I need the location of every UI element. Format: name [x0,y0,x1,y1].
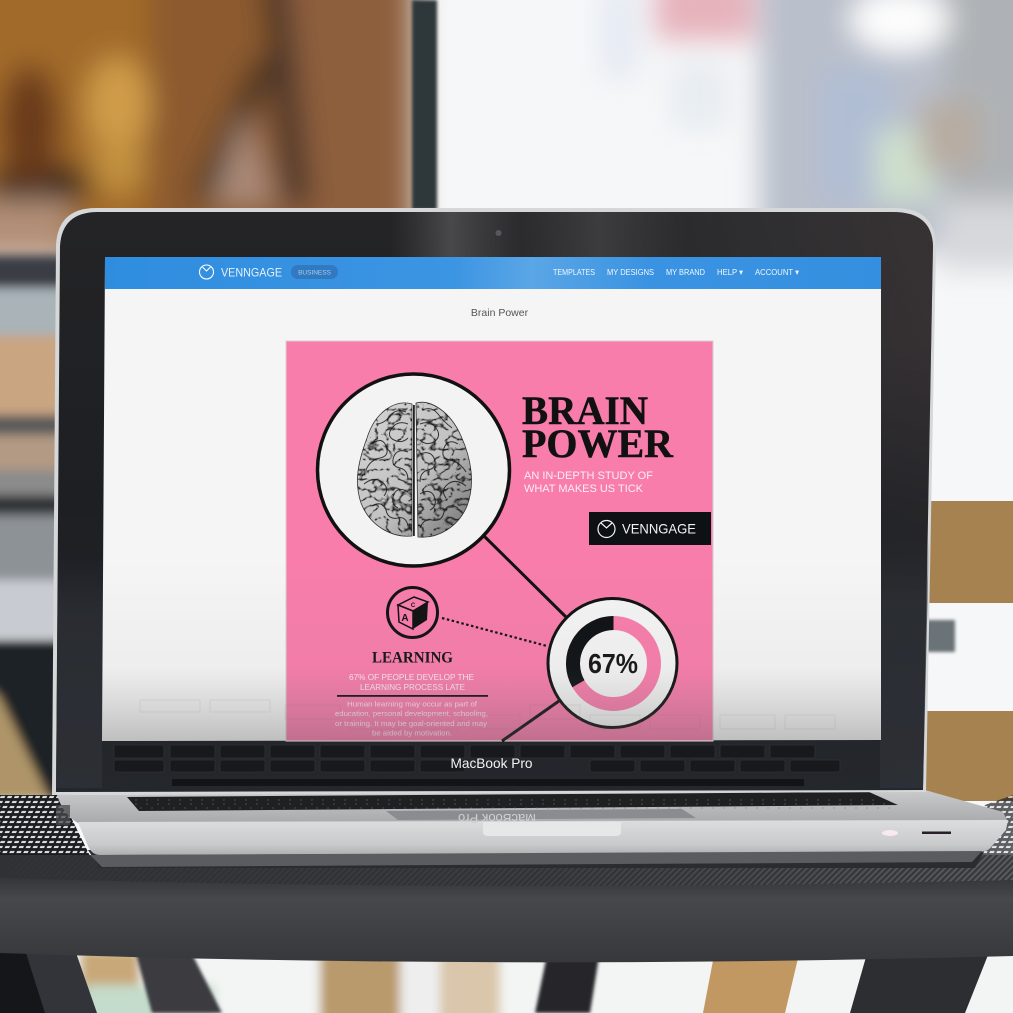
keyboard [127,792,898,811]
camera [496,230,502,236]
learning heading: LEARNING [372,650,454,666]
icon: alphabet block [388,588,438,638]
trackpad edge: MacBook Pro [458,811,536,826]
menu links: MY DESIGNS [607,267,654,277]
brain circle [318,374,510,566]
learning stat text [349,672,474,692]
Venngage logo block: VENNGAGE [622,520,696,536]
pink infographic page [286,341,713,741]
table with mesh surface [0,795,1013,962]
connector: brain to donut [483,535,567,618]
ports on base side [56,805,70,825]
learning stat text: 67% OF PEOPLE DEVELOP THE [349,672,474,682]
document title: Brain Power [471,307,529,319]
shadow under laptop [88,850,985,868]
menu links: HELP ▾ [717,267,744,277]
icon: alphabet block: A [401,613,409,624]
connector: donut downward [502,701,559,741]
icon: brain engraving [357,402,472,537]
learning body text: be aided by motivation. [372,728,452,738]
learning body text: education, personal development, schooling, [335,709,488,718]
logo mark [200,265,214,279]
icon: alphabet block: C [411,603,416,609]
Venngage logo block [589,512,711,545]
laptop base [56,790,1008,867]
learning body text [335,700,488,738]
donut chart: 67% [548,598,677,728]
status light [882,830,898,836]
title: Brain Power [522,388,674,466]
dotted connector [442,618,547,646]
title: Brain Power: POWER [522,421,674,466]
learning stat text: LEARNING PROCESS LATE [360,682,465,692]
business badge: BUSINESS [298,270,332,276]
menu links: TEMPLATES [553,267,595,277]
divider rule [337,695,488,697]
logo wordmark: VENNGAGE [221,266,282,280]
keyboard reflection on screen [102,560,881,741]
lower bezel reflection [880,540,929,788]
laptop [52,208,1008,868]
learning body text: or training. It may be goal-oriented and may [335,719,487,728]
screen [102,257,881,741]
title: Brain Power: BRAIN [522,388,648,433]
MacBook Pro label: MacBook Pro [450,755,533,771]
reflected keyboard [114,745,840,772]
subtitle: AN IN-DEPTH STUDY OF [524,470,653,482]
business badge [291,265,338,279]
infrared slot [922,832,951,834]
menu links [553,267,800,277]
subtitle: WHAT MAKES US TICK [524,483,644,495]
learning body text: Human learning may occur as part of [347,700,478,708]
latch [483,822,621,836]
space below the table [0,950,1013,1013]
trackpad edge [386,809,696,826]
menu links: ACCOUNT ▾ [755,267,800,277]
lid [52,208,936,795]
menu links: MY BRAND [666,267,705,277]
subtitle [524,470,653,495]
donut chart: 67%: 67% [588,648,638,679]
navigation bar [105,257,881,289]
